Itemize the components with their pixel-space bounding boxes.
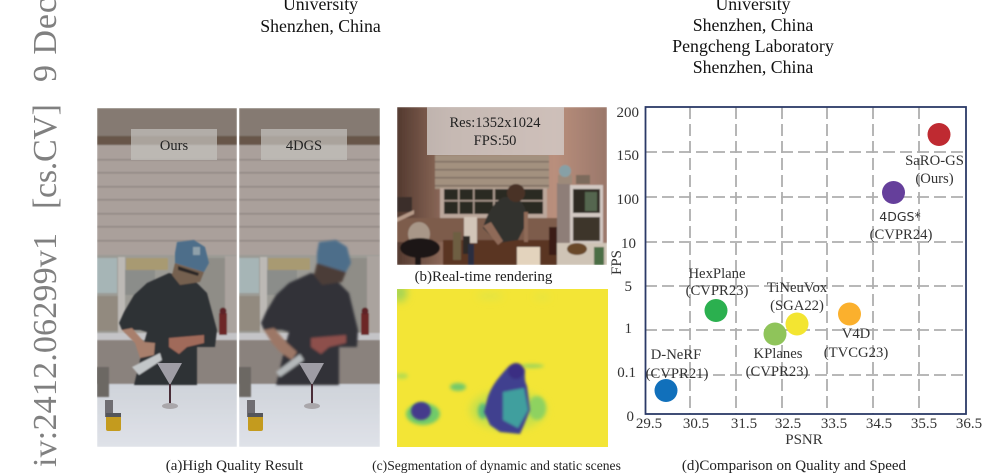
label: 4DGS: 4DGS xyxy=(286,138,322,154)
y axis ticks: 200 xyxy=(616,105,639,121)
y axis ticks: 100 xyxy=(616,192,639,208)
point: KPlanes xyxy=(746,322,809,380)
y axis ticks: 1 xyxy=(624,321,632,337)
point: D-NeRF: D-NeRF xyxy=(651,347,701,363)
point: TiNeuVox: (SGA22) xyxy=(770,298,824,314)
panel a: right photo, 4DGS xyxy=(239,108,380,447)
point: HexPlane xyxy=(686,266,749,322)
x axis ticks: 33.5 xyxy=(821,416,847,432)
panel a: left photo, Ours xyxy=(97,108,237,447)
point: SaRO-GS: (Ours) xyxy=(915,171,954,187)
label: resolution and fps xyxy=(427,107,564,155)
y axis title: FPS xyxy=(609,250,625,275)
label: 4DGS xyxy=(261,129,347,160)
point: SaRO-GS: SaRO-GS xyxy=(905,153,964,169)
header: right affiliation xyxy=(672,0,834,77)
x axis title: PSNR xyxy=(785,432,823,448)
point: KPlanes: (CVPR23) xyxy=(746,364,809,380)
label: resolution and fps: Res:1352x1024 xyxy=(449,115,541,131)
header: right affiliation: Shenzhen, China xyxy=(693,57,813,77)
point: SaRO-GS xyxy=(905,123,964,187)
x axis ticks: 32.5 xyxy=(775,416,801,432)
point: V4D: V4D xyxy=(842,326,871,342)
point: KPlanes: KPlanes xyxy=(754,346,803,362)
x axis ticks: 36.5 xyxy=(956,416,982,432)
y axis ticks: 150 xyxy=(616,148,639,164)
point: TiNeuVox xyxy=(767,280,828,336)
y axis ticks: 0.1 xyxy=(617,365,636,381)
x axis ticks: 29.5 xyxy=(636,416,662,432)
y axis ticks xyxy=(616,105,639,425)
header: right affiliation: Pengcheng Laboratory xyxy=(672,36,834,56)
point: V4D xyxy=(824,302,888,361)
point: V4D: (TVCG23) xyxy=(824,345,888,361)
point: 4DGS*: (CVPR24) xyxy=(870,227,933,243)
x axis ticks: 31.5 xyxy=(731,416,757,432)
chart grid xyxy=(645,107,966,414)
header: right affiliation: Shenzhen, China xyxy=(693,15,813,35)
caption c: (c)Segmentation of dynamic and static scenes xyxy=(372,458,621,474)
x axis ticks: 34.5 xyxy=(866,416,892,432)
point: HexPlane: HexPlane xyxy=(688,266,746,282)
caption a: (a)High Quality Result xyxy=(166,458,304,474)
chart d: FPS vs PSNR scatter xyxy=(609,105,982,448)
x axis ticks: 30.5 xyxy=(683,416,709,432)
y axis ticks: 0 xyxy=(626,409,634,425)
header: left affiliation: Shenzhen, China xyxy=(260,16,381,36)
header: left affiliation xyxy=(260,0,381,36)
label: resolution and fps: FPS:50 xyxy=(474,133,516,149)
point: HexPlane: (CVPR23) xyxy=(686,283,749,299)
y axis ticks: 10 xyxy=(621,236,636,252)
point: TiNeuVox: TiNeuVox xyxy=(767,280,828,296)
point: 4DGS* xyxy=(870,181,933,243)
arXiv side stamp: [cs.CV] xyxy=(27,104,64,209)
x axis ticks xyxy=(636,416,982,432)
x axis ticks: 35.5 xyxy=(911,416,937,432)
panel c: segmentation map xyxy=(393,284,608,447)
chart frame xyxy=(646,107,966,414)
label: Ours xyxy=(131,129,217,160)
arXiv side stamp: 9 Dec xyxy=(27,0,64,82)
point: D-NeRF: (CVPR21) xyxy=(646,366,709,382)
y axis ticks: 5 xyxy=(624,279,632,295)
point: D-NeRF xyxy=(646,347,709,402)
label: Ours: Ours xyxy=(160,138,188,154)
arXiv side stamp xyxy=(27,0,64,467)
point: 4DGS*: 4DGS* xyxy=(879,209,921,224)
arXiv side stamp: iv:2412.06299v1 xyxy=(27,233,64,467)
caption d: (d)Comparison on Quality and Speed xyxy=(682,458,907,474)
panel b: real-time rendering photo xyxy=(397,107,607,265)
caption b: (b)Real-time rendering xyxy=(415,269,553,285)
